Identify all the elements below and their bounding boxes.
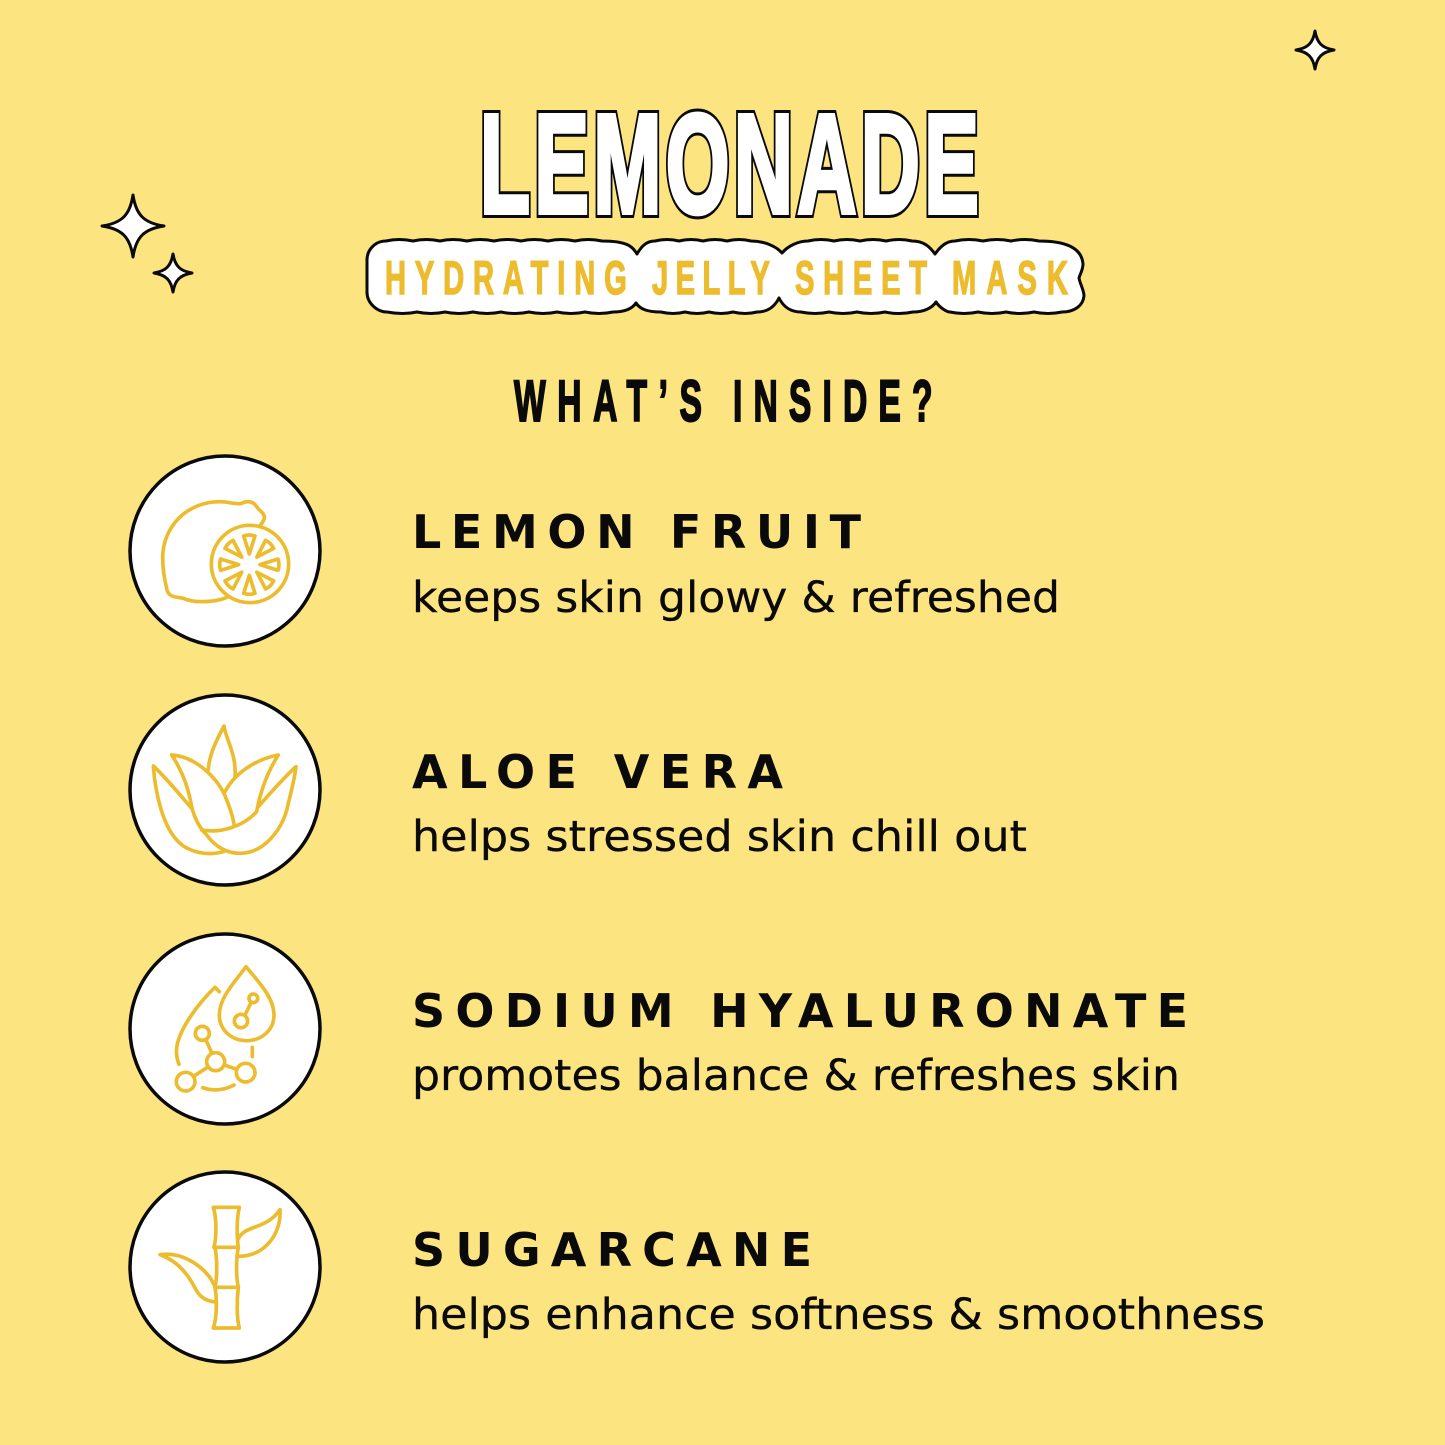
title: LEMONADE bbox=[480, 86, 979, 243]
ingredient benefit: helps enhance softness & smoothness bbox=[412, 1290, 1265, 1340]
icon: lemon bbox=[163, 502, 289, 603]
heading: what's inside: WHAT’S bbox=[514, 370, 702, 434]
icon: sparkle top right bbox=[1296, 31, 1334, 69]
icon circle bbox=[130, 934, 320, 1124]
subtitle text bbox=[385, 253, 1068, 305]
icon circle bbox=[130, 695, 320, 885]
ingredient row: aloe vera bbox=[130, 695, 1027, 885]
icon circle bbox=[130, 456, 320, 646]
ingredient benefit: keeps skin glowy & refreshed bbox=[412, 573, 1060, 623]
subtitle text: MASK bbox=[952, 253, 1068, 305]
icon: molecule and droplet bbox=[176, 967, 274, 1091]
subtitle text: HYDRATING bbox=[385, 253, 627, 305]
ingredient row: sugarcane bbox=[130, 1172, 1265, 1362]
ingredient row: lemon fruit bbox=[130, 456, 1060, 646]
ingredient benefit: promotes balance & refreshes skin bbox=[412, 1051, 1180, 1101]
subtitle text: JELLY bbox=[652, 253, 770, 305]
title: LEMONADE bbox=[480, 86, 979, 243]
ingredient name: ALOE VERA bbox=[412, 745, 783, 799]
subtitle badge bbox=[367, 240, 1084, 314]
icon: small sparkle left bbox=[154, 254, 192, 292]
icon: large sparkle left bbox=[102, 195, 164, 257]
ingredient name: SUGARCANE bbox=[412, 1223, 812, 1277]
icon: sugarcane bbox=[160, 1207, 280, 1328]
icon circle bbox=[130, 1172, 320, 1362]
heading: what's inside bbox=[514, 370, 933, 434]
ingredient name: SODIUM HYALURONATE bbox=[412, 984, 1188, 1038]
badge outline bbox=[367, 240, 1084, 314]
ingredient benefit: helps stressed skin chill out bbox=[412, 812, 1027, 862]
icon: aloe bbox=[153, 726, 296, 854]
heading: what's inside: INSIDE? bbox=[733, 370, 933, 434]
ingredient name: LEMON FRUIT bbox=[412, 505, 862, 559]
subtitle text: SHEET bbox=[795, 253, 927, 305]
ingredient row: sodium hyaluronate bbox=[130, 934, 1188, 1124]
